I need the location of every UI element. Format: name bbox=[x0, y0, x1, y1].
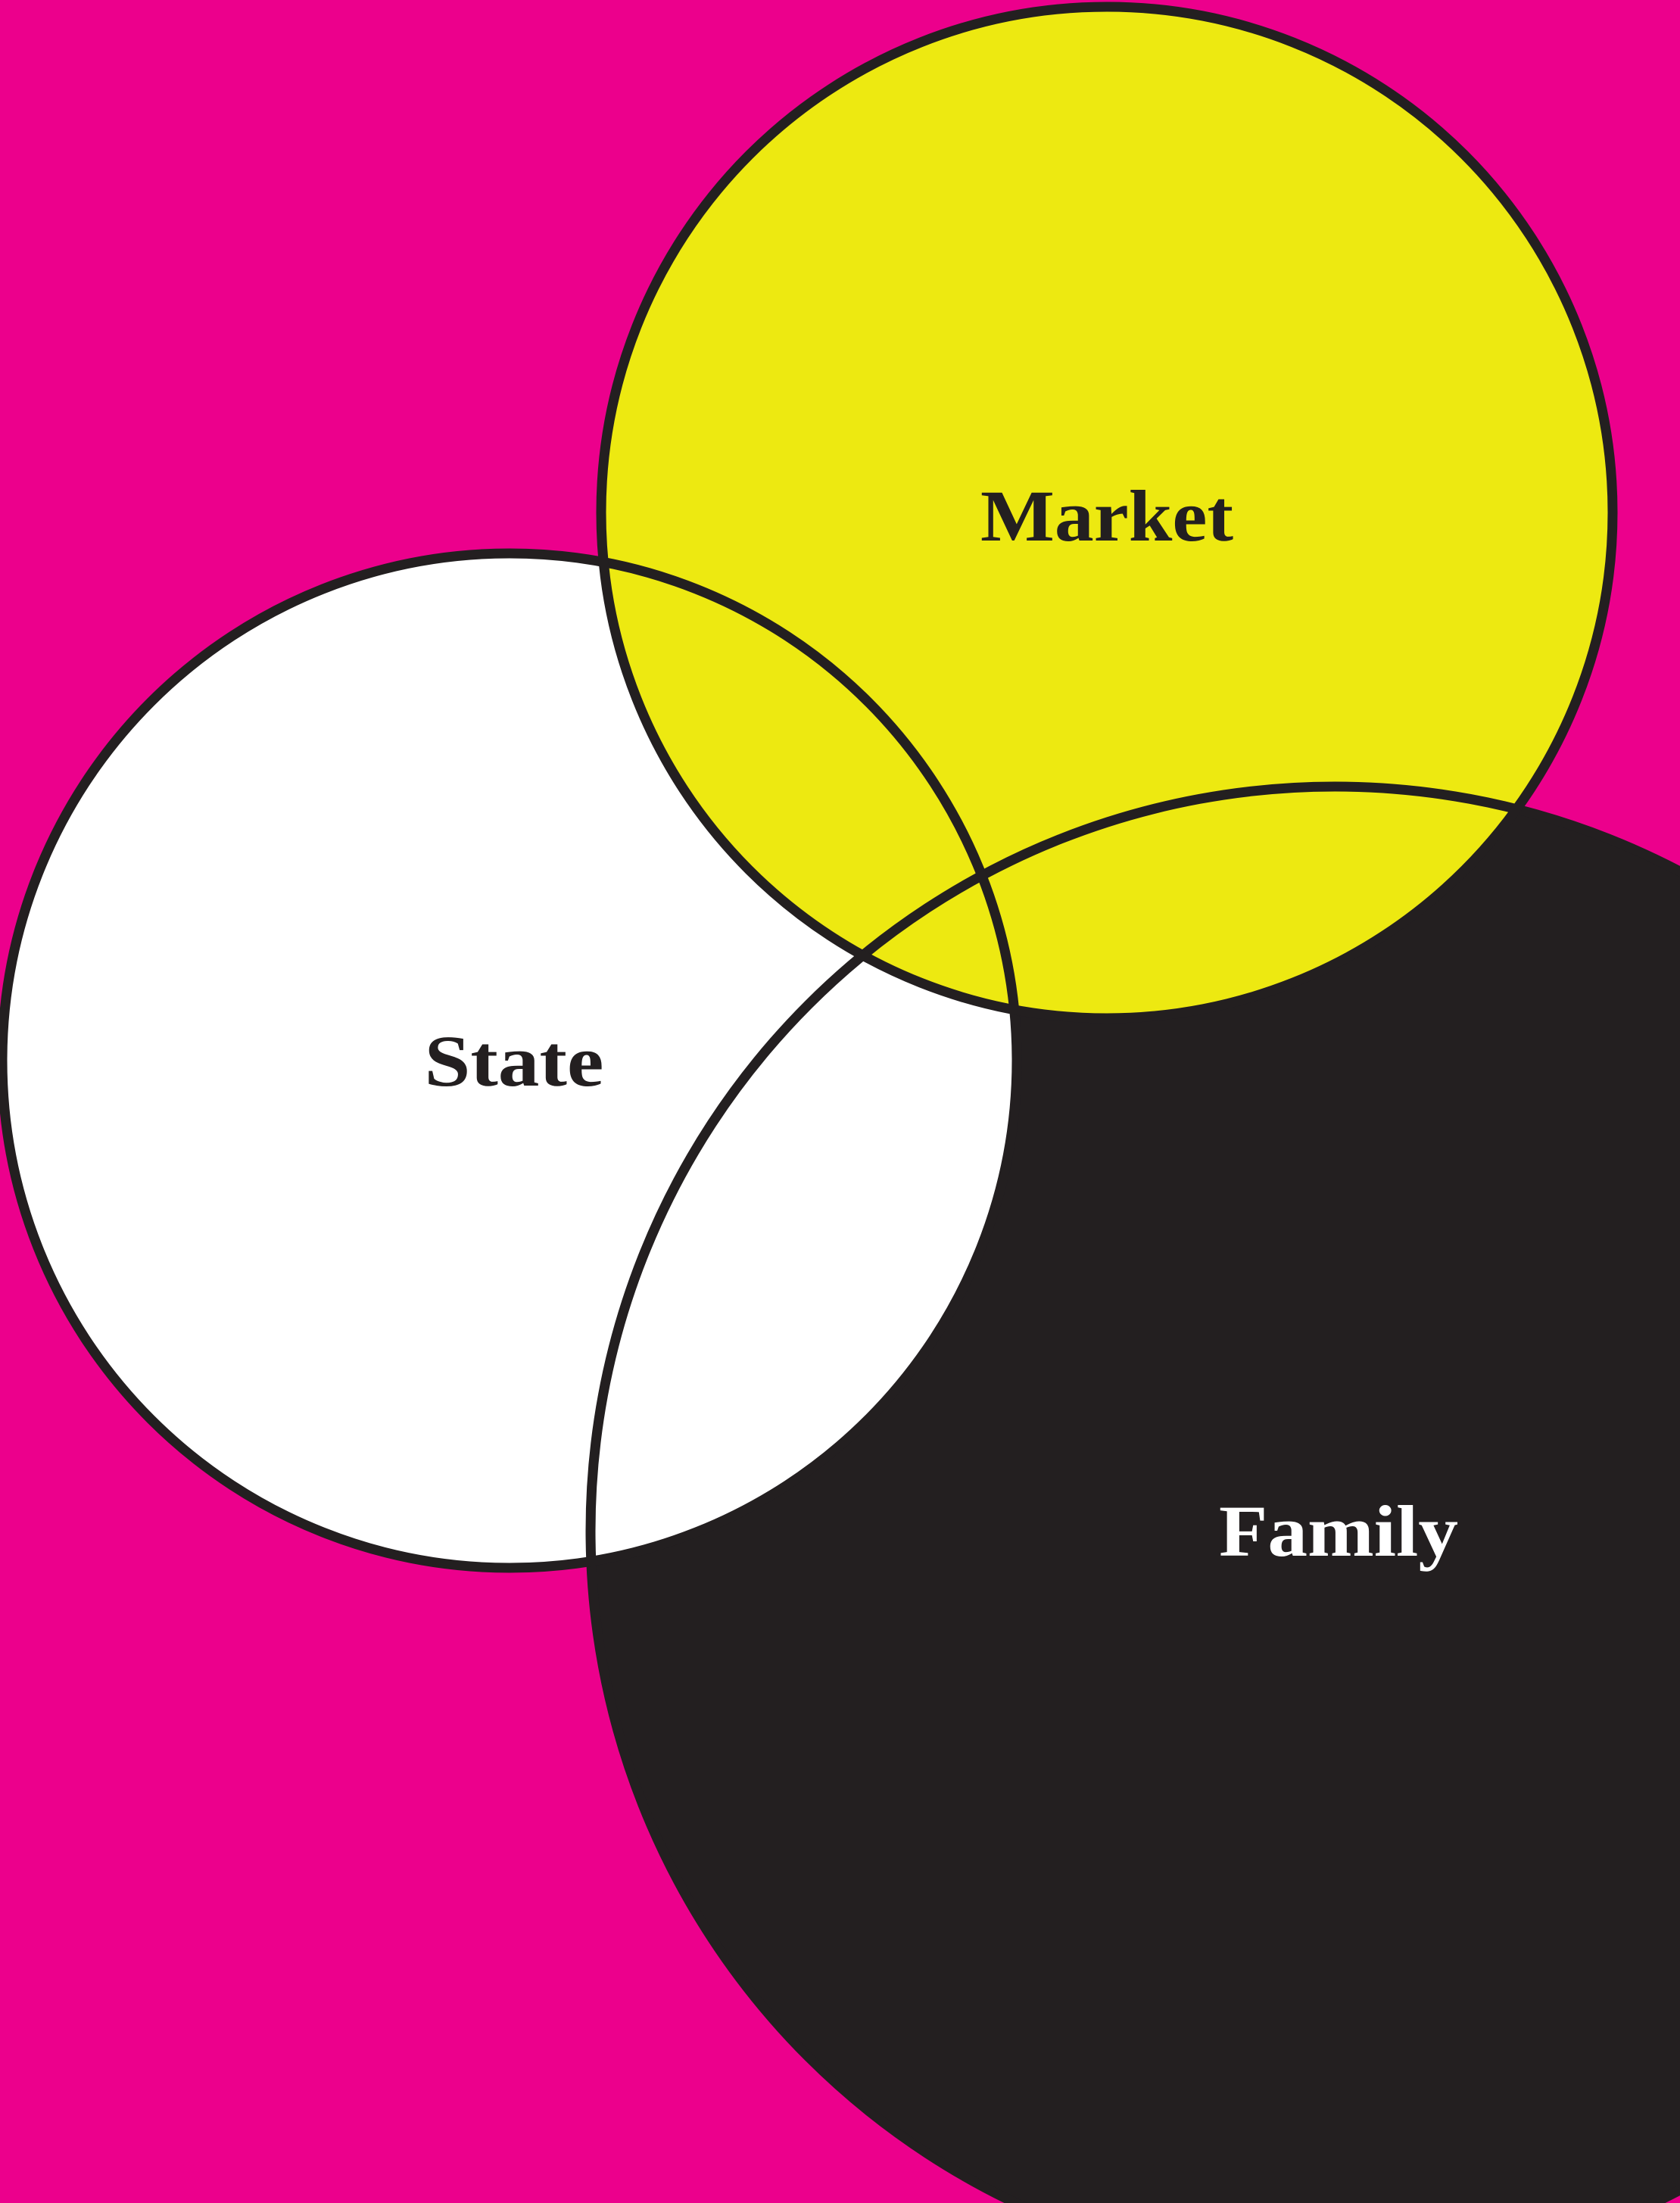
circle: market bbox=[601, 7, 1613, 1018]
circle: family bbox=[591, 787, 1680, 2203]
circle: state bbox=[2, 553, 1017, 1568]
label: family: Family bbox=[1219, 1491, 1458, 1572]
label: state: State bbox=[424, 1020, 604, 1102]
label: market: Market bbox=[980, 475, 1233, 556]
